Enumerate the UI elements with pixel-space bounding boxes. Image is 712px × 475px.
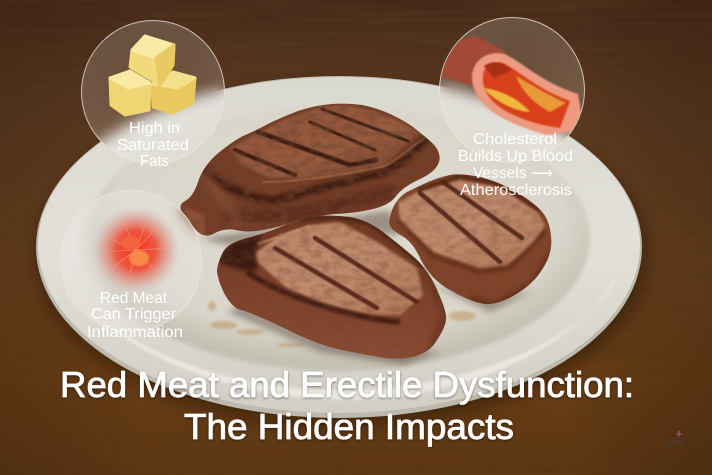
bubble: inflammation [60, 190, 202, 332]
steak: back [172, 104, 440, 240]
white plate [36, 76, 642, 418]
watermark logo [666, 431, 685, 449]
label: high in saturated fats [117, 120, 189, 170]
label: red meat can trigger inflammation: Red Meat [100, 290, 168, 307]
icon: butter cubes [110, 36, 195, 115]
watermark logo: alio [666, 437, 685, 449]
label: red meat can trigger inflammation [87, 290, 183, 341]
label: cholesterol builds up blood vessels to atherosclerosis: Builds Up Blood [458, 148, 573, 165]
label: cholesterol builds up blood vessels to atherosclerosis: Atherosclerosis [460, 182, 572, 199]
label: cholesterol builds up blood vessels to atherosclerosis: Vessels ⟶ [473, 165, 554, 182]
label: red meat can trigger inflammation: Inflammation [87, 324, 183, 341]
label: cholesterol builds up blood vessels to atherosclerosis [458, 131, 573, 199]
icon: inflamed red burst [92, 206, 180, 294]
label: high in saturated fats: Saturated [117, 137, 189, 154]
label: high in saturated fats: High in [129, 120, 180, 137]
title: The Hidden Impacts [184, 406, 514, 447]
title [60, 364, 634, 447]
label: cholesterol builds up blood vessels to atherosclerosis: Cholesterol [473, 131, 557, 148]
steak: front [217, 216, 446, 359]
plate shadow [38, 88, 646, 424]
title: Red Meat and Erectile Dysfunction: [60, 364, 634, 405]
steak: right [389, 174, 552, 304]
bubble: cholesterol [439, 17, 585, 163]
label: red meat can trigger inflammation: Can Trigger [91, 306, 176, 323]
icon: blocked artery [441, 36, 584, 135]
label: high in saturated fats: Fats [140, 153, 169, 170]
meat juices on plate [208, 301, 476, 347]
bubble: saturated fats [81, 20, 225, 164]
steak contact shadows [200, 210, 535, 365]
